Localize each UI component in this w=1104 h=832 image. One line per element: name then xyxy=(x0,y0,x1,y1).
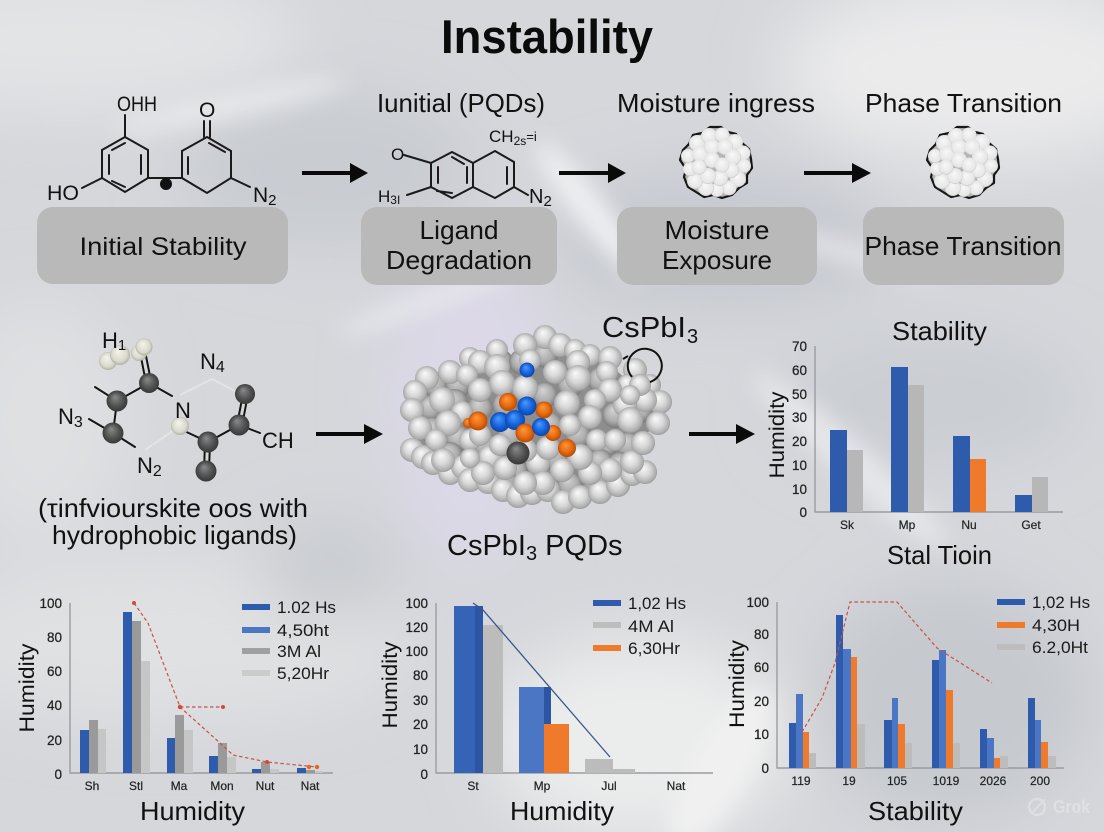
icon: bicyclic molecule: 2s xyxy=(514,134,526,148)
icon: bicyclic molecule: H xyxy=(378,187,390,206)
ball-and-stick ligand molecule: N xyxy=(175,398,191,423)
axes and tick labels: 2026 xyxy=(980,774,1007,788)
axes and tick labels: 40 xyxy=(47,698,62,713)
label box: Ligand Degradation: Degradation xyxy=(386,245,532,275)
label box: Phase Transition: Phase Transition xyxy=(864,231,1062,261)
label box: Phase Transition xyxy=(863,207,1064,285)
axes and tick labels: Sk xyxy=(840,518,855,532)
label: CsPbI3 with circle marker: 3 xyxy=(687,326,698,348)
caption: ligand description: (τinfviourskite oos with xyxy=(38,493,308,523)
chart title: Stability xyxy=(892,316,987,346)
ball-and-stick ligand molecule xyxy=(58,328,294,482)
x axis title: Humidity xyxy=(140,796,245,826)
icon: bicyclic molecule: O xyxy=(391,145,404,164)
label box: Initial Stability xyxy=(37,207,288,284)
label box: Moisture Exposure: Moisture xyxy=(664,215,770,245)
heading: Moisture ingress: Moisture ingress xyxy=(617,88,815,118)
axes and tick labels: 30 xyxy=(792,410,807,425)
ball-and-stick ligand molecule: N xyxy=(58,404,74,429)
legend xyxy=(242,598,336,683)
label: CsPbI3 PQDs: PQDs xyxy=(537,530,623,562)
icon: benzene and cyclohexenone molecule xyxy=(47,93,277,209)
x axis title: Stal Tioin xyxy=(887,540,992,570)
icon: bicyclic molecule: 2 xyxy=(543,193,552,210)
label: CsPbI3 with circle marker xyxy=(602,312,698,382)
axes and tick labels: 60 xyxy=(792,363,807,378)
heading: Iunitial (PQDs): Iunitial (PQDs) xyxy=(377,88,545,118)
label box: Ligand Degradation: Ligand xyxy=(420,215,498,245)
label box: Moisture Exposure: Exposure xyxy=(662,245,772,275)
axes and tick labels: 100 xyxy=(39,596,62,611)
watermark: Grok: Grok xyxy=(1053,797,1091,817)
axes and tick labels xyxy=(16,596,333,793)
label: CsPbI3 with circle marker: CsPbI xyxy=(602,312,686,344)
axes and tick labels: Nut xyxy=(256,779,275,793)
icon: bicyclic molecule: =i xyxy=(526,129,537,144)
ball-and-stick ligand molecule: 2 xyxy=(153,463,162,480)
axes and tick labels: Nu xyxy=(961,518,977,532)
axes and tick labels: 19 xyxy=(842,774,856,788)
ball-and-stick ligand molecule: H xyxy=(102,328,118,353)
watermark: Grok xyxy=(1029,797,1091,817)
axes and tick labels: 20 xyxy=(413,717,428,732)
axes and tick labels: 10 xyxy=(754,727,769,742)
axes and tick labels: 10 xyxy=(792,458,807,473)
icon: benzene and cyclohexenone molecule: OHH xyxy=(117,93,157,116)
chart: stability grouped bars, lower right xyxy=(726,593,1090,826)
axes and tick labels: 20 xyxy=(792,434,807,449)
axes and tick labels: Humidity xyxy=(726,639,749,728)
bars xyxy=(830,367,1048,512)
axes and tick labels: 0 xyxy=(54,767,62,782)
axes and tick labels: 1019 xyxy=(933,774,960,788)
bars xyxy=(789,615,1056,768)
axes and tick labels: Humidity xyxy=(16,643,39,732)
axes and tick labels xyxy=(379,596,713,793)
blue trend line xyxy=(473,603,610,757)
axes and tick labels: Nat xyxy=(301,779,320,793)
red dashed trend line xyxy=(132,601,319,769)
ball-and-stick ligand molecule: N xyxy=(137,453,153,478)
legend: 1,02 Hs xyxy=(628,594,686,613)
label box: Initial Stability: Initial Stability xyxy=(80,233,247,261)
axes and tick labels: 80 xyxy=(754,627,769,642)
axes and tick labels: 30 xyxy=(413,693,428,708)
axes and tick labels: 50 xyxy=(792,387,807,402)
arrow xyxy=(559,163,626,183)
axes and tick labels: 80 xyxy=(47,630,62,645)
legend: 5,20Hr xyxy=(277,664,329,683)
legend: 4M Al xyxy=(628,617,674,636)
icon: bicyclic molecule: CH xyxy=(489,127,514,146)
legend: 1,02 Hs xyxy=(1032,593,1090,612)
axes and tick labels: 20 xyxy=(47,733,62,748)
icon: benzene and cyclohexenone molecule: O xyxy=(199,99,215,122)
axes and tick labels: 10 xyxy=(413,742,428,757)
label: CsPbI3 PQDs: CsPbI xyxy=(447,530,526,562)
icon: bicyclic molecule xyxy=(378,127,552,210)
axes and tick labels: 120 xyxy=(405,620,428,635)
ball-and-stick ligand molecule: 4 xyxy=(216,359,225,376)
axes and tick labels: 20 xyxy=(754,694,769,709)
heading: Phase Transition: Phase Transition xyxy=(865,88,1062,118)
axes and tick labels: 100 xyxy=(405,644,428,659)
arrow xyxy=(316,424,383,444)
red dashed trend line xyxy=(802,602,992,732)
legend: 4,30H xyxy=(1032,616,1080,635)
axes and tick labels: 10 xyxy=(792,482,807,497)
icon: bicyclic molecule: 3I xyxy=(390,193,400,207)
label box: Ligand Degradation xyxy=(361,207,557,285)
legend xyxy=(593,594,686,658)
quantum dot sphere cluster xyxy=(400,325,672,514)
axes and tick labels: 119 xyxy=(791,774,811,788)
axes and tick labels: 100 xyxy=(746,595,769,610)
chart: stability bar chart, upper right xyxy=(766,316,1063,570)
axes and tick labels: 70 xyxy=(792,339,807,354)
chart: humidity bars, lower left xyxy=(16,596,336,826)
axes and tick labels: Sh xyxy=(85,779,99,793)
legend xyxy=(997,593,1090,657)
axes and tick labels: 105 xyxy=(887,774,907,788)
arrow xyxy=(804,163,871,183)
axes and tick labels xyxy=(766,339,1063,532)
axes and tick labels: Jul xyxy=(601,779,617,793)
ball-and-stick ligand molecule: CH xyxy=(262,428,294,453)
icon: bicyclic molecule: N xyxy=(529,186,543,208)
title: Instability xyxy=(441,10,653,63)
axes and tick labels: Ma xyxy=(171,779,188,793)
icon: nanoparticle cluster xyxy=(927,127,999,198)
axes and tick labels: Get xyxy=(1021,518,1041,532)
axes and tick labels: Humidity xyxy=(766,391,789,478)
axes and tick labels: 0 xyxy=(420,767,428,782)
caption: ligand description: hydrophobic ligands) xyxy=(52,520,297,550)
axes and tick labels: 100 xyxy=(405,596,428,611)
label box: Moisture Exposure xyxy=(617,207,817,285)
stage: moisture ingress xyxy=(617,88,817,285)
icon: benzene and cyclohexenone molecule: 2 xyxy=(268,192,277,209)
legend: 6.2,0Ht xyxy=(1032,638,1088,657)
axes and tick labels xyxy=(726,595,1064,788)
axes and tick labels: 60 xyxy=(47,664,62,679)
bars xyxy=(454,606,635,773)
icon: benzene and cyclohexenone molecule: HO xyxy=(47,182,79,205)
x axis title: Stability xyxy=(868,796,963,826)
stage: phase transition xyxy=(863,88,1064,285)
axes and tick labels: 80 xyxy=(413,668,428,683)
axes and tick labels: 0 xyxy=(761,761,769,776)
legend: 4,50ht xyxy=(277,621,329,640)
ball-and-stick ligand molecule: 1 xyxy=(118,337,126,354)
legend: 3M Al xyxy=(277,642,321,661)
arrow xyxy=(689,424,755,444)
label: CsPbI3 PQDs: 3 xyxy=(526,543,537,565)
legend: 1.02 Hs xyxy=(277,598,336,617)
stage: initial stability molecule and box xyxy=(37,93,288,284)
axes and tick labels: 0 xyxy=(799,505,807,520)
caption: ligand description xyxy=(38,493,308,550)
ball-and-stick ligand molecule: N xyxy=(200,349,216,374)
x axis title: Humidity xyxy=(510,796,614,826)
chart: humidity bars, lower centre xyxy=(379,594,713,826)
ball-and-stick ligand molecule: 3 xyxy=(74,414,83,431)
axes and tick labels: Humidity xyxy=(379,641,402,728)
axes and tick labels: 60 xyxy=(754,660,769,675)
stage: ligand degradation molecule and box xyxy=(361,88,557,285)
axes and tick labels: Mp xyxy=(534,779,551,793)
axes and tick labels: Mon xyxy=(210,779,234,793)
axes and tick labels: Mp xyxy=(899,518,916,532)
axes and tick labels: Nat xyxy=(667,779,686,793)
bars xyxy=(80,612,323,773)
axes and tick labels: 200 xyxy=(1030,774,1050,788)
axes and tick labels: St xyxy=(467,779,479,793)
icon: nanoparticle cluster xyxy=(680,127,752,198)
icon: benzene and cyclohexenone molecule: N xyxy=(253,184,268,207)
arrow xyxy=(302,163,368,183)
axes and tick labels: Stl xyxy=(129,779,143,793)
legend: 6,30Hr xyxy=(628,639,680,658)
